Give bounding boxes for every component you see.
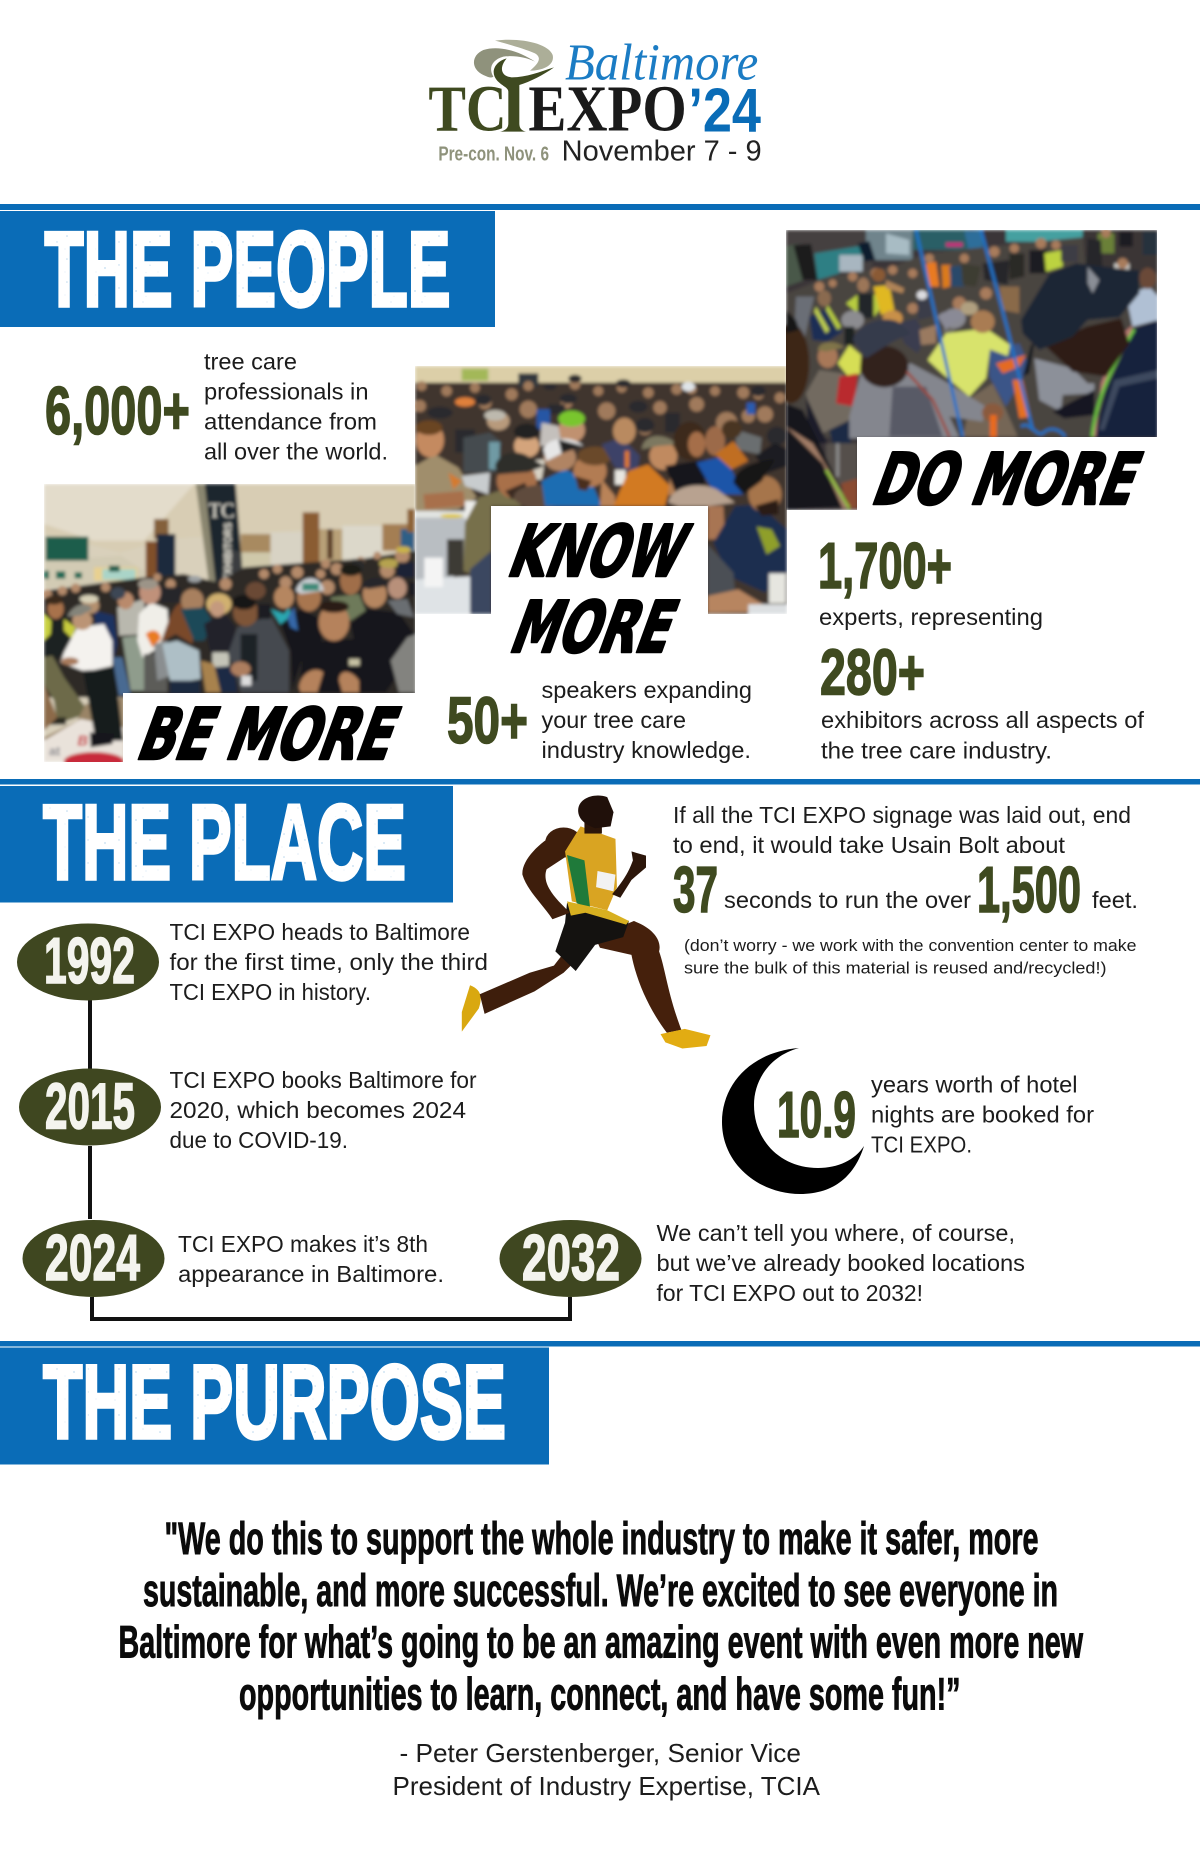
stat: 1,700+ experts: experts, representing xyxy=(819,604,1043,630)
heading: the people xyxy=(0,209,495,329)
photo: be more show floor crowd: at xyxy=(49,745,61,759)
photo: do more climbers workshop xyxy=(773,229,1158,510)
stat: 1,700+ experts: 1,700+ xyxy=(818,529,952,602)
stat: 1,700+ experts xyxy=(818,529,1043,630)
icon: running sprinter xyxy=(462,795,710,1048)
stat: 280+ exhibitors: the tree care industry. xyxy=(821,738,1052,764)
logo: TCI EXPO Baltimore '24: November 7 - 9 xyxy=(562,135,762,167)
heading: the purpose: THE PURPOSE xyxy=(43,1344,506,1461)
attribution: President of Industry Expertise, TCIA xyxy=(392,1771,821,1801)
timeline: 2015: 2015 xyxy=(45,1070,135,1142)
timeline: 2024: appearance in Baltimore. xyxy=(178,1261,444,1287)
icon: crescent moon with hotel stat xyxy=(722,1048,1094,1194)
logo: TCI EXPO Baltimore '24: EXPO xyxy=(528,74,687,146)
stat: 6,000+ attendance: professionals in xyxy=(204,378,368,404)
attribution xyxy=(392,1738,821,1801)
heading: the people: THE PEOPLE xyxy=(44,209,450,329)
logo: TCI EXPO Baltimore '24: ’24 xyxy=(688,77,761,146)
logo: TCI EXPO Baltimore '24: Baltimore xyxy=(565,34,758,91)
icon: crescent moon with hotel stat: nights are booked for xyxy=(871,1102,1094,1128)
quote xyxy=(118,1513,1084,1720)
section rule xyxy=(0,1341,1200,1346)
icon: crescent moon with hotel stat: TCI EXPO. xyxy=(871,1132,972,1158)
callout: Usain Bolt signage: feet. xyxy=(1092,887,1138,913)
timeline: 2032: but we’ve already booked locations xyxy=(656,1250,1025,1276)
photo: know more conference session xyxy=(414,366,787,614)
timeline: 2032 xyxy=(500,1220,1025,1306)
stat: 280+ exhibitors xyxy=(820,636,1144,764)
stat: 50+ speakers: industry knowledge. xyxy=(542,737,751,763)
photo: be more show floor crowd xyxy=(43,484,416,771)
photo: be more show floor crowd: TC xyxy=(208,500,235,522)
label: know more: MORE xyxy=(501,587,689,669)
label: know more: KNOW xyxy=(499,511,700,593)
timeline: 2015 xyxy=(19,1067,477,1153)
stat: 6,000+ attendance xyxy=(45,348,388,464)
stat: 50+ speakers: 50+ xyxy=(447,683,528,757)
callout: Usain Bolt signage: to end, it would take Usain Bolt about xyxy=(673,832,1065,858)
callout: Usain Bolt signage: If all the TCI EXPO signage was laid out, end xyxy=(673,802,1131,828)
heading: the place xyxy=(0,782,453,902)
stat: 6,000+ attendance: tree care xyxy=(204,348,297,374)
callout: Usain Bolt signage: 37 xyxy=(673,853,718,926)
callout: Usain Bolt signage: (don’t worry - we work with the convention center to make xyxy=(684,936,1136,955)
stat: 50+ speakers: speakers expanding xyxy=(542,677,752,703)
callout: Usain Bolt signage: 1,500 xyxy=(977,853,1081,926)
timeline connectors xyxy=(90,1000,570,1319)
icon: crescent moon with hotel stat: years worth of hotel xyxy=(871,1072,1078,1098)
callout: Usain Bolt signage xyxy=(673,802,1138,978)
timeline: 1992 xyxy=(17,919,488,1005)
icon: crescent moon with hotel stat: 10.9 xyxy=(777,1078,856,1151)
timeline: 2032: for TCI EXPO out to 2032! xyxy=(656,1280,923,1306)
timeline: 1992: for the first time, only the third xyxy=(170,949,488,975)
timeline: 1992: TCI EXPO in history. xyxy=(170,979,371,1005)
callout: Usain Bolt signage: seconds to run the over xyxy=(724,887,971,913)
photo: be more show floor crowd: B xyxy=(77,734,88,750)
label: know more xyxy=(491,506,708,676)
stat: 6,000+ attendance: 6,000+ xyxy=(45,373,190,449)
timeline: 2024: TCI EXPO makes it’s 8th xyxy=(178,1231,428,1257)
timeline: 2032: 2032 xyxy=(522,1221,620,1294)
section rule xyxy=(0,779,1200,784)
heading: the place: THE PLACE xyxy=(43,782,406,902)
attribution: - Peter Gerstenberger, Senior Vice xyxy=(400,1738,801,1768)
timeline: 2024: 2024 xyxy=(45,1221,140,1294)
timeline: 1992: TCI EXPO heads to Baltimore xyxy=(170,919,470,945)
stat: 280+ exhibitors: exhibitors across all aspects of xyxy=(821,707,1144,733)
section rule xyxy=(0,204,1200,210)
timeline: 2024 xyxy=(22,1220,444,1297)
heading: the purpose xyxy=(0,1344,549,1464)
label: be more: BE MORE xyxy=(128,694,411,776)
timeline: 2032: We can’t tell you where, of course, xyxy=(656,1220,1015,1246)
stat: 50+ speakers xyxy=(447,677,752,763)
stat: 6,000+ attendance: all over the world. xyxy=(204,438,388,464)
timeline: 2015: 2020, which becomes 2024 xyxy=(170,1097,466,1123)
stat: 50+ speakers: your tree care xyxy=(542,707,686,733)
timeline: 2015: due to COVID-19. xyxy=(170,1127,348,1153)
logo: TCI EXPO Baltimore '24 xyxy=(428,34,762,167)
stat: 280+ exhibitors: 280+ xyxy=(820,636,925,708)
logo: TCI EXPO Baltimore '24: TC xyxy=(428,74,507,146)
timeline: 1992: 1992 xyxy=(44,924,135,997)
stat: 6,000+ attendance: attendance from xyxy=(204,408,377,434)
callout: Usain Bolt signage: sure the bulk of this material is reused and/recycled!) xyxy=(684,958,1106,978)
logo: TCI EXPO Baltimore '24: Pre-con. Nov. 6 xyxy=(438,143,549,166)
timeline: 2015: TCI EXPO books Baltimore for xyxy=(170,1067,477,1093)
photo: be more show floor crowd: EXHIBITORS xyxy=(222,522,234,581)
